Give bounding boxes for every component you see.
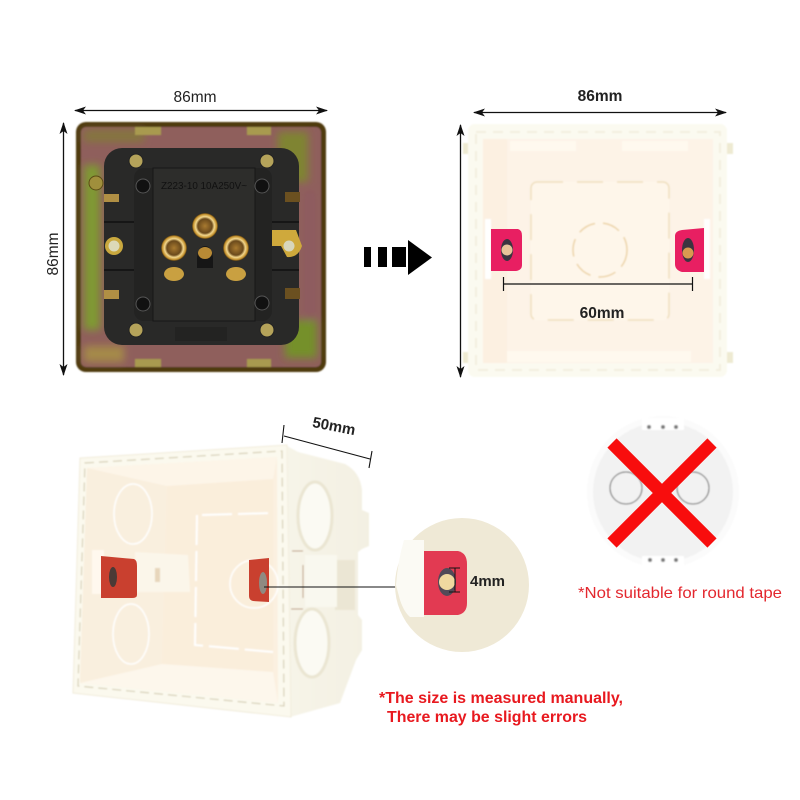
4mm label: 4mm — [470, 573, 505, 590]
box front rim — [73, 445, 291, 717]
brass sockets — [161, 213, 249, 281]
dimension: 60mm: 60mm — [580, 305, 624, 322]
socket back photo — [76, 122, 326, 372]
dimension: box width: 86mm — [578, 88, 622, 105]
magnified circle: nut — [395, 518, 529, 652]
box interior — [80, 457, 278, 703]
red nut right — [249, 558, 269, 602]
dimension: box height — [460, 125, 462, 377]
circle background — [395, 518, 529, 652]
screw hole — [438, 568, 456, 596]
black socket body — [104, 148, 299, 345]
red nut left — [491, 229, 522, 271]
warning: measurement note — [379, 690, 623, 726]
socket rating text: Z223-10 10A250V~ — [161, 181, 247, 192]
4mm marker — [449, 568, 460, 592]
square box perspective view — [73, 445, 369, 717]
square box front view — [463, 124, 733, 377]
box side — [287, 446, 369, 717]
dimension: socket width: 86mm — [173, 89, 217, 106]
screw head — [439, 574, 455, 590]
white rail — [396, 540, 424, 617]
warning: not suitable: *Not suitable for round tape — [578, 585, 782, 602]
red nut — [424, 551, 467, 615]
mounting rivets and screws — [89, 154, 302, 337]
red cross — [612, 443, 712, 543]
arrow: dashed right — [364, 240, 432, 275]
red nut right — [675, 228, 704, 272]
dimension: 50mm depth — [282, 414, 372, 468]
red nut left — [101, 556, 137, 598]
warning: measurement note: *The size is measured manually, — [379, 690, 623, 707]
dimension: 50mm depth: 50mm — [311, 414, 357, 439]
metal plate — [76, 122, 326, 372]
box rim — [463, 124, 733, 377]
dimension: 60mm — [504, 277, 692, 322]
not suitable round box — [587, 416, 739, 568]
leader line — [264, 586, 396, 588]
round box body — [587, 416, 739, 568]
box interior — [483, 139, 713, 363]
warning: measurement note: There may be slight errors — [387, 709, 587, 726]
dimension: socket height: 86mm — [45, 232, 62, 276]
